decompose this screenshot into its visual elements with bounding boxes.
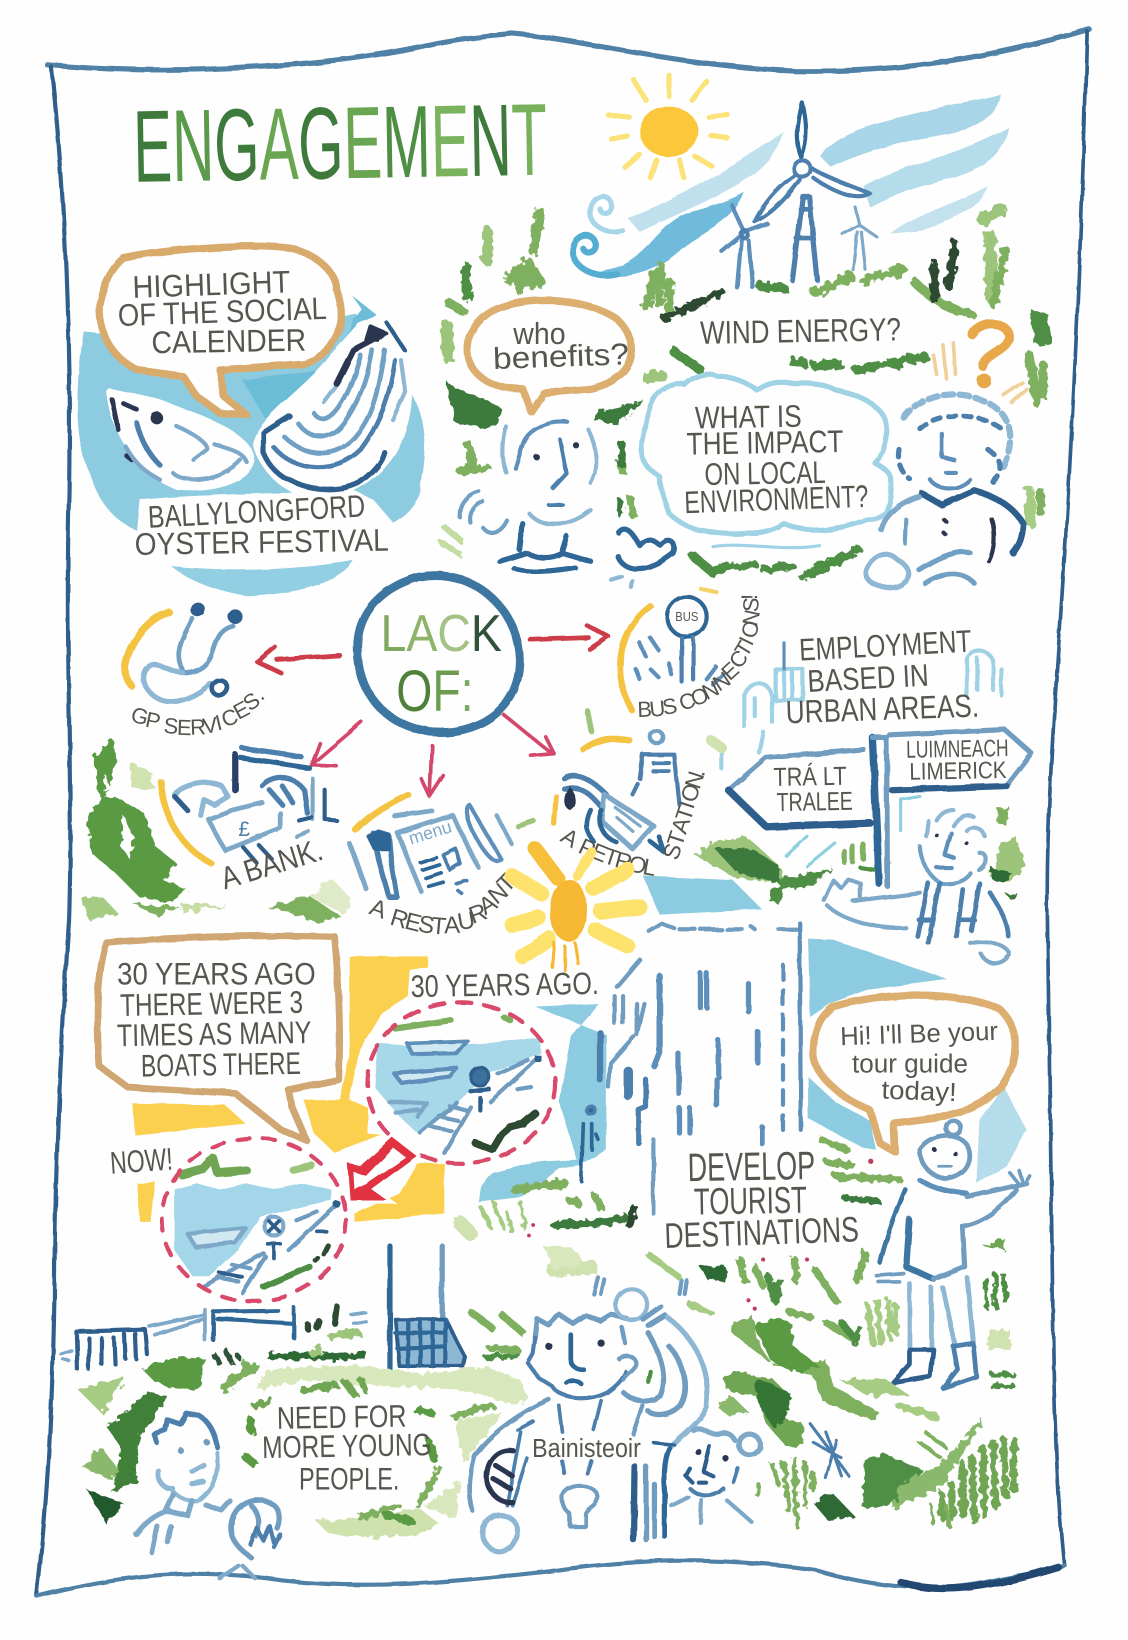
thought cloud: environment: ON LOCAL (704, 455, 826, 492)
scene: boats now (109, 1138, 346, 1301)
text: employment: BASED IN (807, 658, 930, 699)
icon: top sun (608, 75, 728, 178)
speech bubble: highlight: CALENDER (151, 323, 306, 360)
blue wash (77, 295, 425, 596)
text: need for more young people: NEED FOR (277, 1399, 407, 1436)
circle: lack of: OF: (396, 659, 474, 724)
signpost: LUIMNEACH (906, 735, 1009, 764)
signpost (729, 730, 1032, 886)
person: manager with ponytail: Bainisteoir (532, 1433, 641, 1463)
vegetation around wind energy (447, 209, 1043, 577)
icon: restaurant menu: menu (406, 816, 454, 848)
text: employment (784, 624, 980, 730)
circle: lack of (357, 575, 520, 732)
title: ENGAGEMENT (132, 82, 548, 204)
icon: bank (161, 748, 337, 896)
signpost: TRALEE (776, 786, 853, 817)
caption: oyster festival (134, 489, 389, 562)
goal posts (390, 1246, 465, 1369)
flower dots (527, 1159, 873, 1311)
person: woman (460, 422, 596, 571)
thought cloud: environment (641, 374, 891, 548)
speech bubble: tour guide: Hi! I'll Be your (840, 1016, 999, 1051)
text: develop tourist destinations: DESTINATIONS (664, 1209, 859, 1256)
icon: bus stop: BUS (675, 610, 698, 624)
caption: oyster festival: BALLYLONGFORD (147, 489, 366, 535)
speech bubble: thirty years ago (98, 936, 340, 1140)
thought cloud: environment: ENVIRONMENT? (684, 479, 869, 520)
speech bubble: thirty years ago: THERE WERE 3 (120, 985, 303, 1023)
scene: boats now: NOW! (109, 1142, 174, 1181)
icon: bank: A BANK. (217, 832, 327, 896)
thought cloud: environment: THE IMPACT (686, 424, 844, 462)
icon: red arrow (346, 1135, 419, 1202)
speech bubble: thirty years ago: 30 YEARS AGO (117, 957, 316, 992)
yellow wash behind boats (133, 956, 444, 1222)
icon: restaurant menu: A RESTAURANT. (366, 865, 525, 941)
icon: question mark (933, 324, 1027, 402)
person: man at signpost (695, 796, 1027, 964)
icon: bus stop: BUS CONNECTIONS! (637, 594, 765, 722)
person: curly haired man (866, 394, 1023, 587)
speech bubble: thirty years ago: TIMES AS MANY (117, 1015, 312, 1053)
icon: petrol pump (554, 711, 721, 881)
signpost: LIMERICK (909, 757, 1007, 786)
text: employment: EMPLOYMENT (798, 624, 972, 668)
person: tour guide (876, 1121, 1030, 1388)
text: develop tourist destinations: TOURIST (694, 1179, 807, 1223)
speech bubble: tour guide (813, 995, 1015, 1152)
cross hatch stems (810, 1424, 850, 1478)
speech bubble: highlight (99, 246, 341, 415)
meadow right (698, 1237, 1010, 1520)
icon: bird hand (612, 530, 674, 587)
thought cloud: environment: WHAT IS (695, 399, 802, 436)
scene: boats thirty years ago: 30 YEARS AGO. (410, 966, 599, 1004)
icon: urban buildings (721, 651, 1001, 768)
icon: petrol pump: STATION. (657, 765, 710, 863)
speech bubble: who benefits (467, 300, 632, 412)
text: employment: URBAN AREAS. (785, 688, 980, 730)
grass beneath castle (460, 1139, 899, 1270)
speech bubble: tour guide: today! (881, 1075, 957, 1107)
wind swirls (572, 94, 1009, 276)
signpost: TRÁ LT (773, 761, 847, 792)
icon: large oyster (256, 314, 409, 496)
icon: petrol pump: A PETROL (557, 823, 658, 881)
speech bubble: tour guide: tour guide (852, 1048, 968, 1078)
text: develop tourist destinations (664, 1144, 859, 1256)
speech bubble: who benefits: who (512, 318, 566, 351)
text: need for more young people (262, 1399, 432, 1496)
wind turbines (721, 102, 876, 287)
icon: small oyster (110, 392, 251, 487)
person: boy (136, 1413, 280, 1578)
castle tower (581, 923, 801, 1214)
icon: second sun (512, 849, 640, 970)
speech bubble: thirty years ago: BOATS THERE (141, 1046, 301, 1084)
icon: bank: £ (238, 818, 250, 841)
tree beside bank (81, 738, 352, 923)
meadow washes (77, 1246, 581, 1538)
icon: restaurant menu (350, 794, 533, 941)
circle: lack of: LACK (381, 605, 502, 663)
heading: wind energy: WIND ENERGY? (700, 311, 901, 351)
scene: boats thirty years ago (367, 966, 599, 1163)
icon: GP stethoscope: GP SERVICES. (128, 682, 269, 740)
panel: oyster festival (77, 246, 425, 596)
person: manager with ponytail (470, 1277, 707, 1552)
icon: GP stethoscope (125, 603, 269, 740)
caption: oyster festival: OYSTER FESTIVAL (134, 523, 389, 562)
speech bubble: highlight: HIGHLIGHT (132, 264, 291, 305)
text: need for more young people: MORE YOUNG (262, 1427, 432, 1465)
text: develop tourist destinations: DEVELOP (687, 1144, 816, 1190)
person: small child (671, 1428, 760, 1523)
fence and field (61, 1307, 366, 1369)
arrows from lack of (257, 625, 608, 796)
speech bubble: who benefits: benefits? (493, 338, 629, 376)
text: need for more young people: PEOPLE. (299, 1461, 399, 1496)
speech bubble: highlight: OF THE SOCIAL (117, 291, 327, 333)
blue washes behind castle (479, 876, 1027, 1202)
